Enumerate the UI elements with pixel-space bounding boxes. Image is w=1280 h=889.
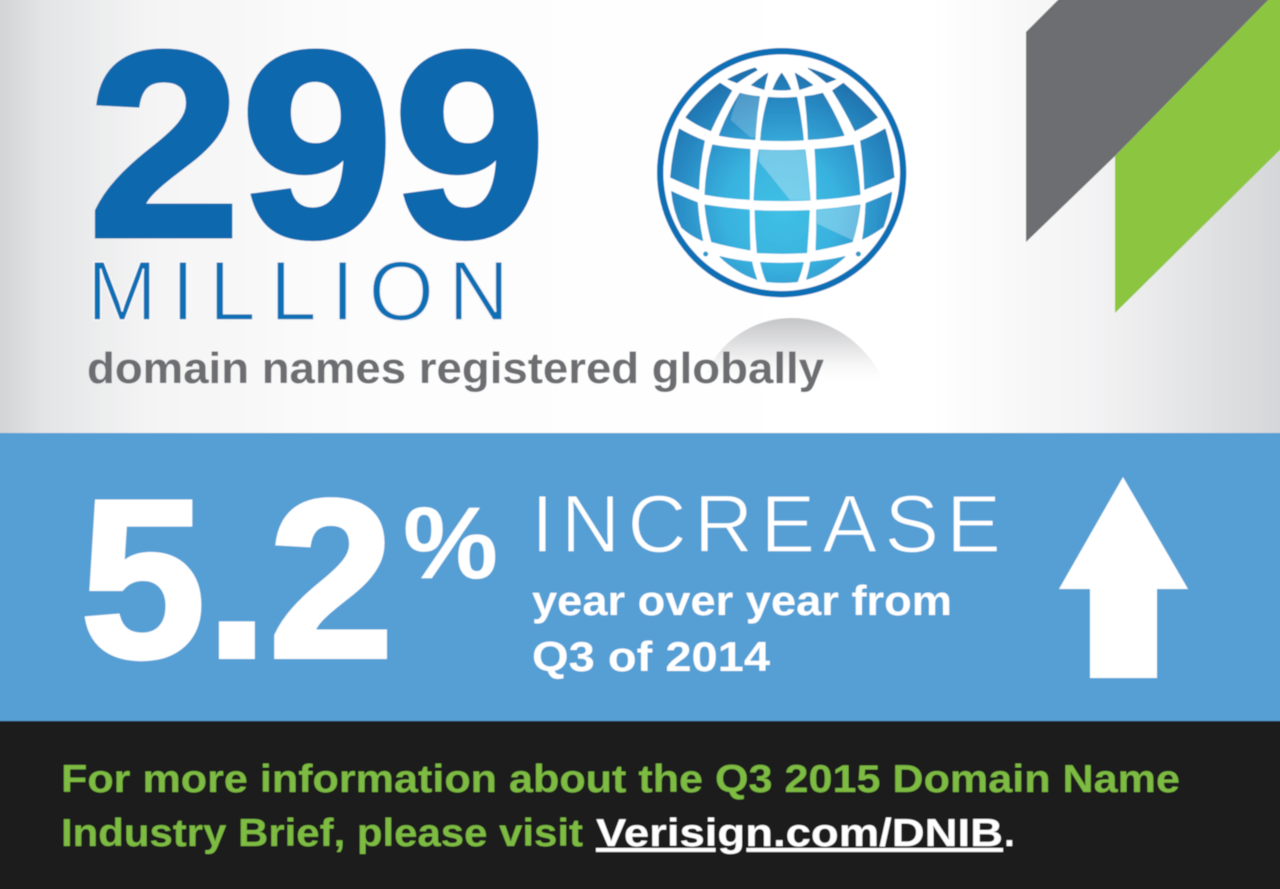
heading: 299: 299 — [88, 0, 546, 293]
text: Q3 of 2014: Q3 of 2014 — [532, 633, 771, 680]
link: Verisign.com/DNIB: Verisign.com/DNIB — [596, 812, 1003, 855]
graphic: grey chevron — [1026, 0, 1278, 242]
icon: globe reflection — [702, 318, 886, 385]
panel: top background — [0, 0, 1280, 433]
text: footer line 1: For more information about the Q3 2015 Domain Name — [61, 758, 1180, 801]
arrow: up — [1059, 477, 1188, 678]
graphic: green chevron — [1115, 0, 1280, 313]
text: footer line 2: Industry Brief, please visit — [61, 812, 583, 855]
text: period: . — [1004, 812, 1015, 855]
stat: 5.2: 5.2 — [80, 452, 394, 705]
panel: blue band — [0, 433, 1280, 721]
stat: percent sign: % — [403, 486, 498, 600]
heading: INCREASE: INCREASE — [531, 479, 1001, 570]
text: year over year: year over year from — [532, 577, 952, 624]
icon: globe — [657, 48, 906, 297]
heading: MILLION: MILLION — [87, 244, 509, 338]
globe highlights — [731, 93, 860, 241]
text: domain names registered globally: domain names registered globally — [87, 344, 825, 393]
panel: black footer — [0, 721, 1280, 889]
